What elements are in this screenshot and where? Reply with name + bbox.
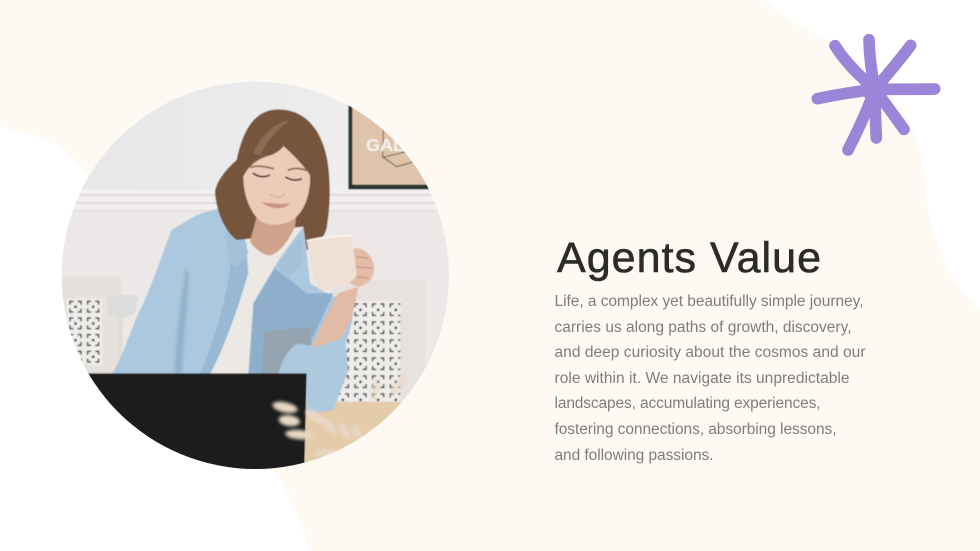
neck bbox=[250, 217, 296, 256]
jacket placket bbox=[200, 257, 248, 374]
body text: fostering connections, absorbing lessons, bbox=[554, 421, 836, 438]
shirt pocket bbox=[262, 327, 312, 374]
inner jacket panel bbox=[248, 268, 333, 374]
right radiator cover bbox=[333, 280, 425, 403]
jacket shading bbox=[175, 270, 188, 374]
table bbox=[305, 402, 412, 472]
body text: landscapes, accumulating experiences, bbox=[554, 395, 820, 412]
body text: Life, a complex yet beautifully simple journey, bbox=[554, 293, 864, 310]
wall bbox=[82, 82, 350, 190]
eyes bbox=[253, 173, 301, 180]
icon: purple asterisk star bbox=[817, 40, 935, 150]
body text: carries us along paths of growth, discovery, bbox=[554, 319, 852, 336]
jacket bbox=[112, 208, 354, 374]
forearm bbox=[312, 287, 358, 348]
title: Agents Value bbox=[557, 234, 821, 282]
laptop bbox=[80, 373, 307, 472]
nose and mouth bbox=[262, 194, 290, 208]
eyebrows bbox=[251, 166, 307, 171]
left radiator cover bbox=[60, 277, 122, 373]
body text bbox=[554, 293, 866, 464]
photo: woman with mug at laptop bbox=[60, 80, 452, 472]
mug bbox=[307, 236, 357, 291]
body text: role within it. We navigate its unpredictable bbox=[554, 370, 850, 387]
t-shirt bbox=[210, 244, 281, 374]
hand with fingers bbox=[350, 248, 374, 287]
framed poster: GAL bbox=[366, 135, 404, 155]
wall moulding bbox=[74, 190, 438, 212]
body text: and following passions. bbox=[554, 447, 714, 464]
hair back bbox=[215, 109, 330, 250]
body text: and deep curiosity about the cosmos and our bbox=[554, 344, 866, 361]
jacket cuff and sleeve bbox=[278, 343, 348, 374]
collar bbox=[228, 234, 249, 266]
chair back bbox=[107, 295, 138, 353]
fringe highlight bbox=[253, 120, 290, 155]
dried pampas grass bbox=[272, 372, 409, 457]
framed poster bbox=[348, 105, 429, 190]
face bbox=[243, 146, 310, 225]
